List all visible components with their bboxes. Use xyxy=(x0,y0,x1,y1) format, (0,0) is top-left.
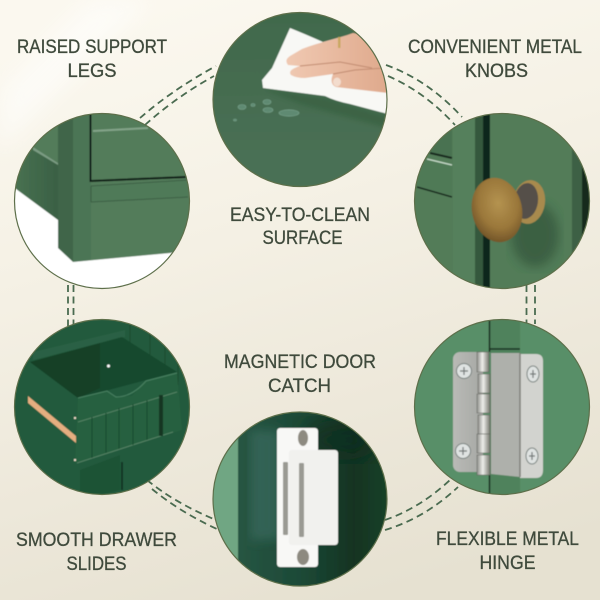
knob shadow xyxy=(511,203,559,267)
label: smooth drawer slides: SLIDES xyxy=(66,554,126,575)
label: easy-to-clean surface: EASY-TO-CLEAN xyxy=(230,205,370,226)
label: smooth drawer slides: SMOOTH DRAWER xyxy=(16,530,177,551)
white floor xyxy=(15,188,172,288)
label: convenient metal knobs: KNOBS xyxy=(465,61,528,82)
icon: wooden slide xyxy=(28,396,76,443)
hinge screws xyxy=(456,364,539,464)
panel: convenient metal knobs photo xyxy=(410,110,595,295)
icon: hand xyxy=(286,33,388,93)
label: raised support legs: RAISED SUPPORT xyxy=(17,37,167,58)
hinge knuckles xyxy=(477,352,490,475)
panel: smooth drawer slides photo xyxy=(10,315,195,500)
icon: white magnetic catch xyxy=(277,428,338,567)
light rays xyxy=(0,0,150,150)
dashed connector ring xyxy=(68,65,535,530)
panel: easy-to-clean surface photo xyxy=(210,10,390,190)
drawer interior xyxy=(84,337,176,396)
shadow gap xyxy=(90,112,186,181)
icon: water droplets xyxy=(234,100,299,121)
label: easy-to-clean surface: SURFACE xyxy=(262,228,342,249)
panel: raised support legs photo xyxy=(14,112,190,290)
label: magnetic door catch: MAGNETIC DOOR xyxy=(224,352,376,373)
label: magnetic door catch: CATCH xyxy=(268,376,331,397)
icon: metal hinge xyxy=(453,352,543,478)
panel: flexible metal hinge photo xyxy=(410,315,595,500)
label: raised support legs: LEGS xyxy=(68,61,116,82)
panel: magnetic door catch photo xyxy=(210,408,390,590)
label: convenient metal knobs: CONVENIENT METAL xyxy=(408,37,582,58)
icon: brass knob xyxy=(471,177,546,242)
label: flexible metal hinge: FLEXIBLE METAL xyxy=(436,529,579,550)
label: flexible metal hinge: HINGE xyxy=(480,553,536,574)
icon: white cloth xyxy=(262,28,388,114)
drawer front xyxy=(177,384,178,385)
drawer side xyxy=(28,363,78,463)
